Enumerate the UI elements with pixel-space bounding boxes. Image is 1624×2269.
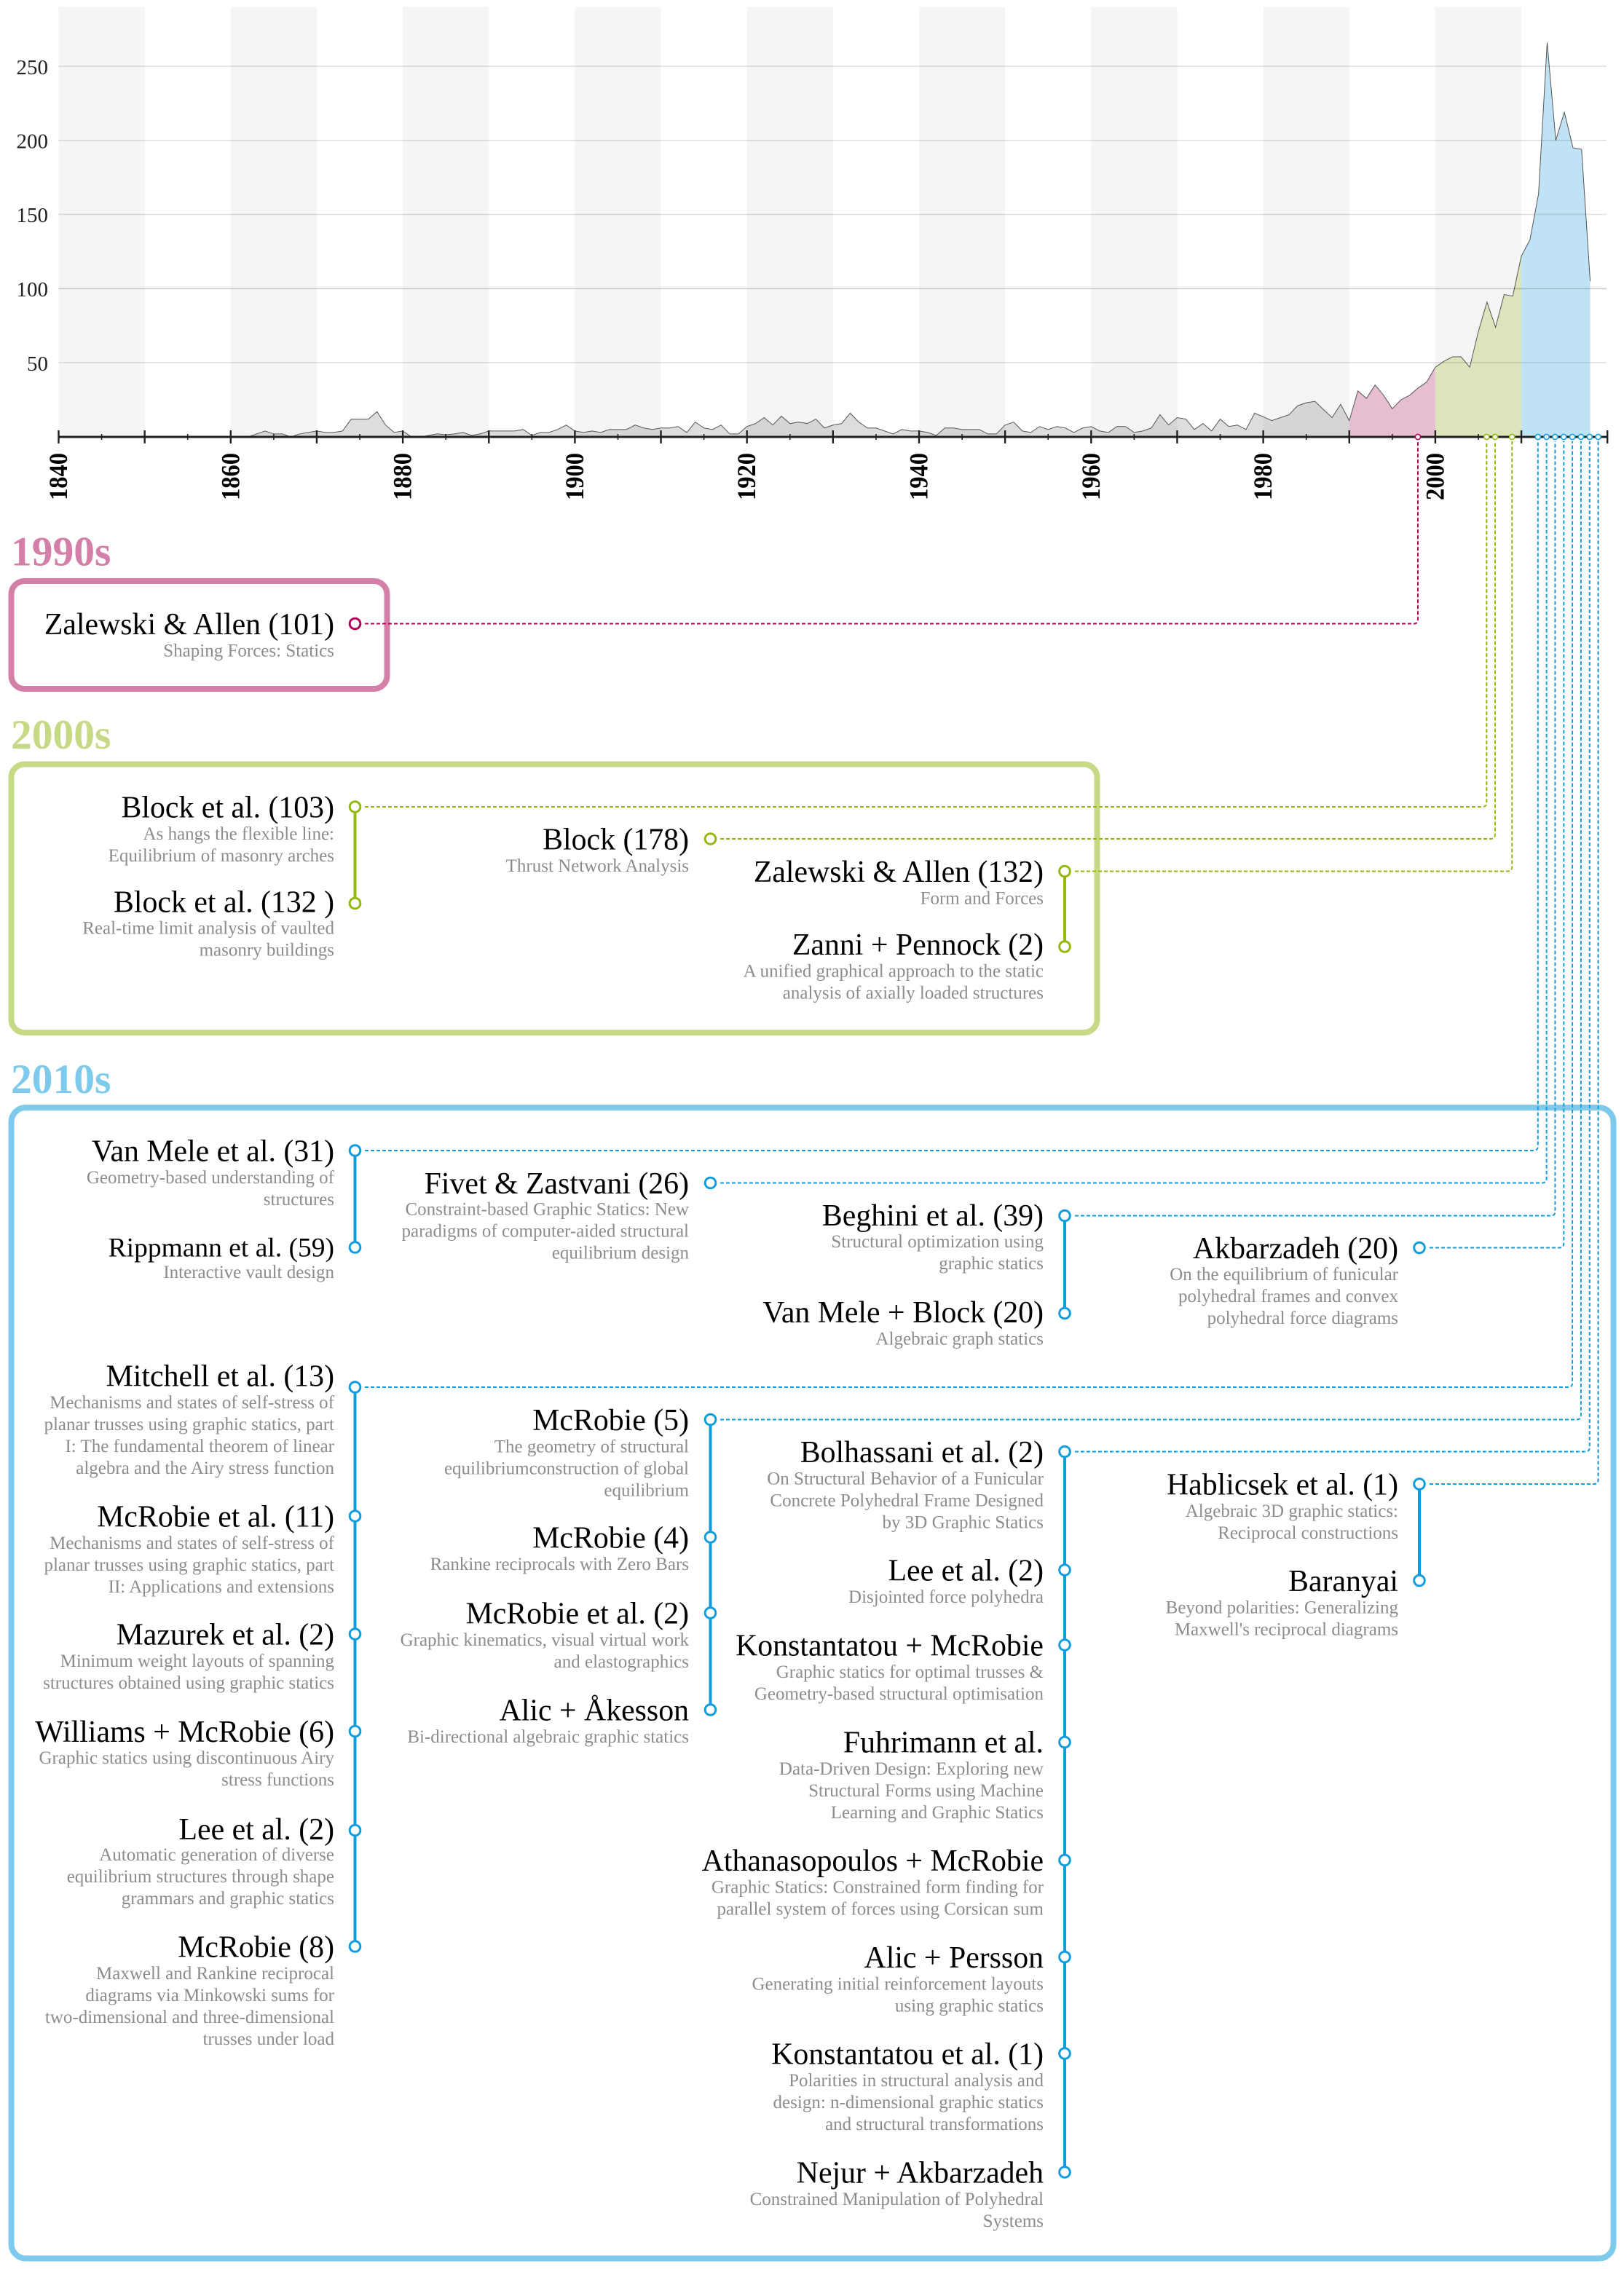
entry: Fuhrimann et al.: Structural Forms using Machine (808, 1781, 1044, 1801)
entry: Van Mele + Block (20): Algebraic graph statics (876, 1330, 1044, 1349)
entry: Hablicsek et al. (1): Reciprocal constructions (1218, 1523, 1398, 1543)
entry: Alic + Åkesson: Bi-directional algebraic graphic statics (407, 1727, 689, 1747)
entry: Konstantatou + McRobie: Geometry-based structural optimisation (754, 1684, 1044, 1704)
entry: Nejur + Akbarzadeh: Constrained Manipulation of Polyhedral (750, 2190, 1044, 2209)
entry: Mitchell et al. (13): Mitchell et al. (13) (106, 1360, 334, 1394)
entry: Beghini et al. (39): Structural optimization using (831, 1232, 1044, 1252)
area series by era (248, 42, 1591, 437)
entry: McRobie et al. (2) (401, 1598, 689, 1672)
entry: Konstantatou + McRobie: Graphic statics for optimal trusses & (776, 1662, 1044, 1682)
entry: Athanasopoulos + McRobie (702, 1844, 1044, 1919)
entry: Alic + Persson (752, 1941, 1044, 2016)
axis markers: publication years (1415, 434, 1601, 440)
entry: Rippmann et al. (59) (109, 1234, 334, 1282)
area: before 1990 (248, 401, 1349, 437)
x axis year labels (45, 453, 1450, 500)
entry: McRobie (8): two-dimensional and three-dimensional (45, 2008, 334, 2027)
node (350, 1941, 360, 1952)
entry: Fivet & Zastvani (26): paradigms of computer-aided structural (402, 1222, 689, 1241)
group: 2010s lower column 3 (702, 1436, 1070, 2231)
entry: Mitchell et al. (13): algebra and the Airy stress function (76, 1459, 334, 1478)
x axis year labels: 1940 (905, 453, 934, 500)
entry: Zalewski & Allen (101): Zalewski & Allen (101) (44, 608, 334, 642)
entry: Van Mele et al. (31) (87, 1134, 335, 1210)
node (705, 1705, 716, 1715)
group: 2010s lower column 4 (1166, 1468, 1424, 1640)
entry: McRobie (8): trusses under load (202, 2029, 334, 2049)
entry: Zanni + Pennock (2): A unified graphical approach to the static (744, 961, 1044, 982)
entry: McRobie et al. (2): and elastographics (554, 1652, 689, 1672)
node (1060, 942, 1070, 952)
node (705, 834, 716, 844)
entry: Fuhrimann et al.: Fuhrimann et al. (843, 1726, 1044, 1759)
heading: 2010s: 2010s (11, 1057, 111, 1102)
entry: Alic + Åkesson: Alic + Åkesson (500, 1694, 689, 1727)
node (705, 1608, 716, 1618)
entry: McRobie et al. (11) (44, 1500, 335, 1597)
entry: Block (178): Thrust Network Analysis (506, 856, 689, 876)
entry: Zanni + Pennock (2) (744, 928, 1044, 1003)
entry: McRobie (8): diagrams via Minkowski sums for (85, 1986, 335, 2005)
entry: McRobie et al. (11): McRobie et al. (11) (97, 1500, 334, 1534)
entry: Konstantatou + McRobie (736, 1630, 1044, 1704)
entry: McRobie et al. (11): II: Applications and extensions (109, 1577, 334, 1597)
entry: Block et al. (103): Block et al. (103) (121, 791, 334, 824)
area outline (248, 42, 1591, 437)
entry: Williams + McRobie (6): stress functions (221, 1770, 334, 1790)
entry: Van Mele + Block (20): Van Mele + Block (20) (762, 1296, 1044, 1330)
entry: Zalewski & Allen (132) (754, 856, 1044, 909)
entry: Baranyai (1166, 1565, 1398, 1640)
entry: Mitchell et al. (13): planar trusses using graphic statics, part (44, 1415, 334, 1435)
entry: Lee et al. (2): Lee et al. (2) (179, 1813, 334, 1847)
entry: Block et al. (103) (109, 791, 334, 866)
entry: McRobie (8): Maxwell and Rankine reciprocal (96, 1964, 334, 1984)
entry: Beghini et al. (39): Beghini et al. (39) (822, 1199, 1044, 1233)
decade background bands (58, 7, 1521, 437)
entry: Mazurek et al. (2): Minimum weight layouts of spanning (60, 1652, 334, 1671)
group: 1990s entries (44, 608, 360, 661)
node (350, 1382, 360, 1392)
entry: McRobie (5): McRobie (5) (532, 1404, 689, 1437)
entry: Block et al. (103): Equilibrium of masonry arches (109, 846, 334, 866)
heading: 1990s: 1990s (11, 529, 111, 575)
entry: Akbarzadeh (20): polyhedral force diagrams (1207, 1309, 1398, 1328)
y axis labels (16, 56, 48, 376)
node (1060, 1640, 1070, 1650)
node (1060, 1565, 1070, 1575)
entry: Nejur + Akbarzadeh: Nejur + Akbarzadeh (797, 2157, 1044, 2190)
node (1060, 2167, 1070, 2177)
entry: Bolhassani et al. (2): by 3D Graphic Statics (883, 1513, 1044, 1532)
node (705, 1414, 716, 1425)
entry: Van Mele et al. (31): structures (264, 1190, 334, 1210)
node (1414, 1242, 1424, 1253)
entry: Konstantatou et al. (1): Konstantatou et al. (1) (771, 2037, 1044, 2071)
entry: McRobie (8) (45, 1931, 335, 2049)
entry: Akbarzadeh (20): polyhedral frames and convex (1178, 1287, 1398, 1306)
entry: Nejur + Akbarzadeh (750, 2157, 1044, 2231)
node (350, 1511, 360, 1521)
entry: Zanni + Pennock (2): Zanni + Pennock (2) (792, 928, 1044, 962)
node (350, 1242, 360, 1252)
node (1060, 866, 1070, 877)
entry: Akbarzadeh (20) (1170, 1232, 1399, 1328)
entry: McRobie et al. (11): Mechanisms and states of self-stress of (50, 1534, 335, 1553)
entry: Rippmann et al. (59): Rippmann et al. (59) (109, 1234, 334, 1263)
x axis year labels: 1920 (733, 453, 762, 500)
timeline stem (1063, 1452, 1066, 2172)
y axis labels: 150 (16, 204, 48, 227)
group: 2010s lower column 2 (401, 1404, 716, 1747)
entry: Zalewski & Allen (101) (44, 608, 334, 661)
node: Zalewski & Allen (350, 618, 360, 629)
timeline stem (1063, 871, 1066, 947)
connectors: 2010s to axis (365, 441, 1599, 1484)
node (1414, 1575, 1424, 1586)
entry: Van Mele et al. (31): Geometry-based understanding of (87, 1168, 335, 1188)
area: 2000s (1435, 256, 1521, 437)
entry: McRobie (8): McRobie (8) (178, 1931, 334, 1965)
timeline stem (1418, 1484, 1421, 1580)
entry: Zanni + Pennock (2): analysis of axially loaded structures (783, 983, 1044, 1003)
entry: Block et al. (132 ): Block et al. (132 ) (114, 885, 334, 919)
entry: McRobie et al. (2): McRobie et al. (2) (466, 1598, 689, 1631)
entry: McRobie (5): equilibriumconstruction of global (444, 1459, 689, 1478)
entry: Konstantatou et al. (1): design: n-dimensional graphic statics (773, 2093, 1044, 2112)
timeline stem (1063, 1216, 1066, 1314)
entry: Block et al. (132 ): Real-time limit analysis of vaulted (82, 919, 334, 938)
entry: Block et al. (103): As hangs the flexible line: (143, 824, 334, 844)
entry: Zalewski & Allen (132): Form and Forces (921, 888, 1044, 909)
entry: Bolhassani et al. (2): On Structural Behavior of a Funicular (767, 1469, 1044, 1488)
node (1060, 1952, 1070, 1962)
node (1060, 1446, 1070, 1457)
group: 2000s column 3 (744, 856, 1070, 1003)
panel: 2010s box (12, 1108, 1614, 2259)
entry: Beghini et al. (39): graphic statics (939, 1254, 1044, 1274)
node (1060, 1855, 1070, 1866)
entry: Fuhrimann et al. (779, 1726, 1044, 1823)
node (350, 1726, 360, 1737)
group: 2000s column 1 (82, 791, 360, 960)
entry: Williams + McRobie (6): Graphic statics using discontinuous Airy (39, 1748, 334, 1768)
entry: Mitchell et al. (13): I: The fundamental theorem of linear (65, 1437, 335, 1456)
entry: Hablicsek et al. (1): Algebraic 3D graphic statics: (1186, 1502, 1398, 1521)
entry: McRobie et al. (2): Graphic kinematics, visual virtual work (401, 1630, 689, 1650)
entry: Lee et al. (2) (848, 1554, 1044, 1607)
x axis year labels: 1860 (217, 453, 245, 500)
entry: Fivet & Zastvani (26): Fivet & Zastvani (26) (425, 1167, 689, 1201)
group: 2010s upper column 3 (762, 1199, 1070, 1349)
entry: Lee et al. (2): grammars and graphic statics (122, 1889, 334, 1909)
entry: Mitchell et al. (13) (44, 1360, 335, 1478)
entry: Fuhrimann et al.: Learning and Graphic Statics (831, 1803, 1044, 1823)
node (1060, 1308, 1070, 1319)
entry: Fivet & Zastvani (26) (402, 1167, 689, 1263)
entry: Lee et al. (2): Disjointed force polyhedra (848, 1587, 1044, 1607)
x axis year labels: 1840 (45, 453, 73, 500)
entry: Block (178): Block (178) (543, 823, 689, 856)
entry: Konstantatou et al. (1) (771, 2037, 1044, 2134)
area: 2010s (1521, 42, 1591, 437)
entry: Williams + McRobie (6) (35, 1716, 334, 1790)
entry: Alic + Persson: Alic + Persson (864, 1941, 1044, 1975)
entry: Hablicsek et al. (1): Hablicsek et al. (1) (1167, 1468, 1398, 1502)
entry: Williams + McRobie (6): Williams + McRobie (6) (35, 1716, 334, 1749)
y axis labels: 100 (16, 278, 48, 301)
entry: Van Mele et al. (31): Van Mele et al. (31) (92, 1134, 334, 1168)
entry: Athanasopoulos + McRobie: parallel system of forces using Corsican sum (717, 1899, 1044, 1919)
y axis labels: 250 (16, 56, 48, 79)
y axis labels: 200 (16, 130, 48, 153)
entry: Mazurek et al. (2): Mazurek et al. (2) (117, 1618, 334, 1652)
area: 1990s (1349, 367, 1435, 437)
node (1414, 1479, 1424, 1489)
node (350, 1629, 360, 1639)
entry: Lee et al. (2): equilibrium structures through shape (67, 1867, 334, 1887)
connector: 1990s to axis (365, 441, 1418, 623)
entry: Zalewski & Allen (132): Zalewski & Allen (132) (754, 856, 1044, 889)
timeline stem (354, 807, 357, 903)
entry: Baranyai: Baranyai (1288, 1565, 1398, 1598)
entry: Fivet & Zastvani (26): equilibrium design (552, 1244, 689, 1263)
node (350, 802, 360, 812)
entry: Fivet & Zastvani (26): Constraint-based Graphic Statics: New (405, 1200, 689, 1219)
node (1060, 2048, 1070, 2059)
timeline stem (709, 1420, 712, 1710)
entry: McRobie et al. (11): planar trusses using graphic statics, part (44, 1555, 334, 1575)
timeline stem (354, 1387, 357, 1946)
node (350, 1145, 360, 1156)
group: 2010s upper column 2 (402, 1167, 716, 1263)
entry: McRobie (4): Rankine reciprocals with Zero Bars (430, 1555, 689, 1574)
entry: Baranyai: Maxwell's reciprocal diagrams (1175, 1619, 1398, 1640)
x axis year labels: 1900 (561, 453, 589, 500)
entry: Van Mele + Block (20) (762, 1296, 1044, 1349)
entry: Akbarzadeh (20): Akbarzadeh (20) (1193, 1232, 1398, 1266)
entry: Konstantatou et al. (1): Polarities in structural analysis and (789, 2071, 1044, 2091)
entry: Konstantatou et al. (1): and structural transformations (825, 2115, 1044, 2134)
x axis with ticks (58, 430, 1607, 443)
entry: Fuhrimann et al.: Data-Driven Design: Exploring new (779, 1759, 1044, 1779)
entry: Rippmann et al. (59): Interactive vault design (163, 1263, 334, 1282)
x axis year labels: 1880 (389, 453, 417, 500)
entry: Hablicsek et al. (1) (1167, 1468, 1398, 1543)
timeline stem (354, 1151, 357, 1247)
entry: Block (178) (506, 823, 689, 876)
panel: 1990s box (12, 581, 387, 689)
entry: Alic + Åkesson (407, 1694, 689, 1747)
x axis year labels: 1960 (1077, 453, 1105, 500)
group: 2010s lower column 1 (35, 1360, 360, 2049)
entry: Konstantatou + McRobie: Konstantatou + McRobie (736, 1630, 1044, 1663)
entry: Lee et al. (2) (67, 1813, 334, 1909)
entry: Mazurek et al. (2) (43, 1618, 334, 1693)
entry: McRobie (4) (430, 1522, 689, 1574)
group: 2010s upper column 4 (1170, 1232, 1424, 1328)
entry: Mitchell et al. (13): Mechanisms and states of self-stress of (50, 1393, 335, 1413)
node (350, 1825, 360, 1836)
x axis year labels: 2000 (1422, 453, 1450, 500)
entry: Zalewski & Allen (101): Shaping Forces: Statics (163, 641, 334, 661)
entry: Athanasopoulos + McRobie: Graphic Statics: Constrained form finding for (712, 1877, 1044, 1898)
entry: Akbarzadeh (20): On the equilibrium of funicular (1170, 1265, 1399, 1285)
entry: Bolhassani et al. (2): Concrete Polyhedral Frame Designed (770, 1491, 1044, 1510)
panel: 2000s box (12, 765, 1097, 1033)
entry: McRobie (4): McRobie (4) (532, 1522, 689, 1555)
node (705, 1532, 716, 1542)
x axis year labels: 1980 (1250, 453, 1277, 500)
node (1060, 1737, 1070, 1748)
entry: Alic + Persson: Generating initial reinforcement layouts (752, 1975, 1044, 1994)
group: 2000s column 2 (506, 823, 716, 876)
connectors: 2000s to axis (365, 441, 1512, 871)
entry: Block et al. (132 ): masonry buildings (200, 941, 334, 960)
heading: 2000s: 2000s (11, 712, 111, 758)
node (705, 1177, 716, 1188)
entry: Athanasopoulos + McRobie: Athanasopoulos + McRobie (702, 1844, 1044, 1878)
group: 2010s upper column 1 (87, 1134, 360, 1282)
entry: McRobie (5): The geometry of structural (494, 1437, 689, 1456)
entry: Mazurek et al. (2): structures obtained using graphic statics (43, 1673, 334, 1693)
chart: publications per year area chart (16, 7, 1607, 500)
entry: Lee et al. (2): Automatic generation of diverse (99, 1845, 334, 1865)
y axis labels: 50 (27, 352, 48, 376)
node (350, 898, 360, 909)
entry: McRobie (5): equilibrium (604, 1481, 690, 1500)
entry: Alic + Persson: using graphic statics (895, 1997, 1044, 2016)
entry: Lee et al. (2): Lee et al. (2) (888, 1554, 1044, 1587)
entry: Block et al. (132 ) (82, 885, 334, 960)
entry: Bolhassani et al. (2): Bolhassani et al. (2) (800, 1436, 1044, 1469)
node (1060, 1210, 1070, 1221)
entry: Beghini et al. (39) (822, 1199, 1044, 1274)
entry: Bolhassani et al. (2) (767, 1436, 1044, 1532)
entry: McRobie (5) (444, 1404, 690, 1500)
entry: Nejur + Akbarzadeh: Systems (983, 2211, 1044, 2231)
entry: Baranyai: Beyond polarities: Generalizing (1166, 1598, 1398, 1618)
